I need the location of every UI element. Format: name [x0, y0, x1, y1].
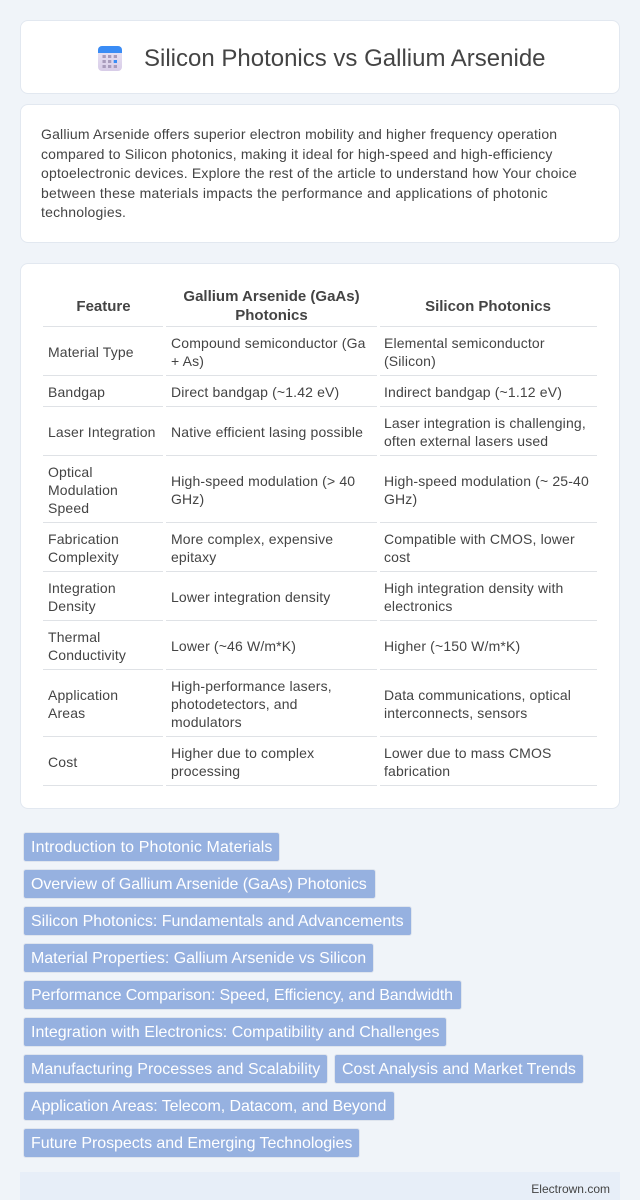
row: optical modulation speed: High-speed modulation (~ 25-40	[384, 473, 589, 489]
row: optical modulation speed	[48, 464, 589, 516]
row: integration density	[48, 580, 563, 614]
row: laser integration: Native efficient lasing possible	[171, 424, 363, 440]
row: optical modulation speed: GHz)	[171, 491, 204, 507]
row: cost: processing	[171, 763, 240, 779]
comparison table	[43, 288, 597, 786]
topic: cost analysis	[334, 1054, 584, 1084]
topic: GaAs overview	[23, 869, 376, 899]
row: application areas: interconnects, sensors	[384, 705, 527, 721]
topic: introduction	[23, 832, 280, 862]
row: integration density: Density	[48, 598, 96, 614]
row: laser integration: Laser Integration	[48, 424, 156, 440]
row: fabrication complexity: Complexity	[48, 549, 119, 565]
row: fabrication complexity: epitaxy	[171, 549, 216, 565]
topic: silicon fundamentals: Silicon Photonics: Fundamentals and Advancements	[31, 913, 404, 930]
topic: performance	[23, 980, 462, 1010]
row: cost: Higher due to complex	[171, 745, 314, 761]
row: application areas: Application	[48, 687, 118, 703]
row: integration density: Integration	[48, 580, 116, 596]
table header row: Feature	[76, 298, 131, 315]
row: material type	[48, 335, 545, 369]
row: optical modulation speed: High-speed modulation (> 40	[171, 473, 355, 489]
row: material type: Compound semiconductor (Ga	[171, 335, 366, 351]
topic: cost analysis: Cost Analysis and Market Trends	[342, 1061, 576, 1078]
table header row	[76, 288, 551, 324]
intro paragraph: technologies.	[41, 204, 126, 220]
row: optical modulation speed: GHz)	[384, 491, 417, 507]
row: fabrication complexity: Fabrication	[48, 531, 119, 547]
row: bandgap: Bandgap	[48, 384, 105, 400]
row: thermal conductivity: Thermal	[48, 629, 100, 645]
topic: GaAs overview: Overview of Gallium Arsenide (GaAs) Photonics	[31, 876, 367, 893]
row: thermal conductivity	[48, 629, 520, 663]
topic: manufacturing: Manufacturing Processes and Scalability	[31, 1061, 320, 1078]
topic: application areas	[23, 1091, 395, 1121]
row: bandgap: Indirect bandgap (~1.12 eV)	[384, 384, 562, 400]
header card	[20, 20, 620, 94]
row: bandgap: Direct bandgap (~1.42 eV)	[171, 384, 339, 400]
row: material type: + As)	[171, 353, 204, 369]
topic link list	[23, 832, 584, 1158]
footer credit: Electrown.com	[531, 1182, 610, 1196]
row: laser integration	[48, 415, 586, 449]
topic: manufacturing	[23, 1054, 328, 1084]
row: fabrication complexity: More complex, expensive	[171, 531, 333, 547]
row: fabrication complexity: cost	[384, 549, 410, 565]
row: integration density: electronics	[384, 598, 453, 614]
row: application areas: High-performance lasers,	[171, 678, 332, 694]
row: material type: Elemental semiconductor	[384, 335, 545, 351]
row: application areas: modulators	[171, 714, 242, 730]
row: laser integration: often external lasers used	[384, 433, 548, 449]
topic: integration: Integration with Electronics: Compatibility and Challenges	[31, 1024, 439, 1041]
footer	[20, 1172, 620, 1200]
topic: material properties	[23, 943, 374, 973]
row: integration density: High integration density with	[384, 580, 563, 596]
row: thermal conductivity: Conductivity	[48, 647, 126, 663]
intro paragraph: compared to Silicon photonics, making it ideal for high-speed and high-efficiency	[41, 146, 553, 162]
row: optical modulation speed: Speed	[48, 500, 89, 516]
intro paragraph: Gallium Arsenide offers superior electron mobility and higher frequency operation	[41, 126, 557, 142]
icon: calendar grid	[98, 46, 122, 71]
row: cost: Lower due to mass CMOS	[384, 745, 551, 761]
table header row: Gallium Arsenide (GaAs)	[183, 288, 360, 305]
intro paragraph	[41, 126, 577, 220]
row: material type: (Silicon)	[384, 353, 436, 369]
topic: future prospects: Future Prospects and Emerging Technologies	[31, 1135, 352, 1152]
row: bandgap	[48, 384, 562, 400]
row: fabrication complexity	[48, 531, 575, 565]
row: integration density: Lower integration density	[171, 589, 330, 605]
row: optical modulation speed: Optical	[48, 464, 93, 480]
table header row: Photonics	[235, 307, 308, 324]
topic: silicon fundamentals	[23, 906, 412, 936]
row: thermal conductivity: Lower (~46 W/m*K)	[171, 638, 296, 654]
topic: material properties: Material Properties: Gallium Arsenide vs Silicon	[31, 950, 366, 967]
row: cost: Cost	[48, 754, 77, 770]
row: cost	[48, 745, 551, 779]
comparison table panel	[20, 263, 620, 809]
row: cost: fabrication	[384, 763, 450, 779]
row: material type: Material Type	[48, 344, 134, 360]
row: application areas: photodetectors, and	[171, 696, 298, 712]
row: application areas	[48, 678, 571, 730]
row: optical modulation speed: Modulation	[48, 482, 118, 498]
row: application areas: Data communications, optical	[384, 687, 571, 703]
row: application areas: Areas	[48, 705, 85, 721]
topic: integration	[23, 1017, 447, 1047]
intro text panel	[20, 104, 620, 243]
topic: introduction: Introduction to Photonic Materials	[31, 839, 273, 856]
row: thermal conductivity: Higher (~150 W/m*K)	[384, 638, 520, 654]
intro paragraph: between these materials impacts the performance and applications of photonic	[41, 184, 548, 200]
row: laser integration: Laser integration is challenging,	[384, 415, 586, 431]
topic: performance: Performance Comparison: Speed, Efficiency, and Bandwidth	[31, 987, 453, 1004]
topic: application areas: Application Areas: Telecom, Datacom, and Beyond	[31, 1098, 386, 1115]
topic: future prospects	[23, 1128, 360, 1158]
title: Silicon Photonics vs Gallium Arsenide	[144, 45, 546, 72]
row: fabrication complexity: Compatible with CMOS, lower	[384, 531, 575, 547]
intro paragraph: optoelectronic devices. Explore the rest of the article to understand how Your choice	[41, 165, 577, 181]
table header row: Silicon Photonics	[425, 298, 551, 315]
